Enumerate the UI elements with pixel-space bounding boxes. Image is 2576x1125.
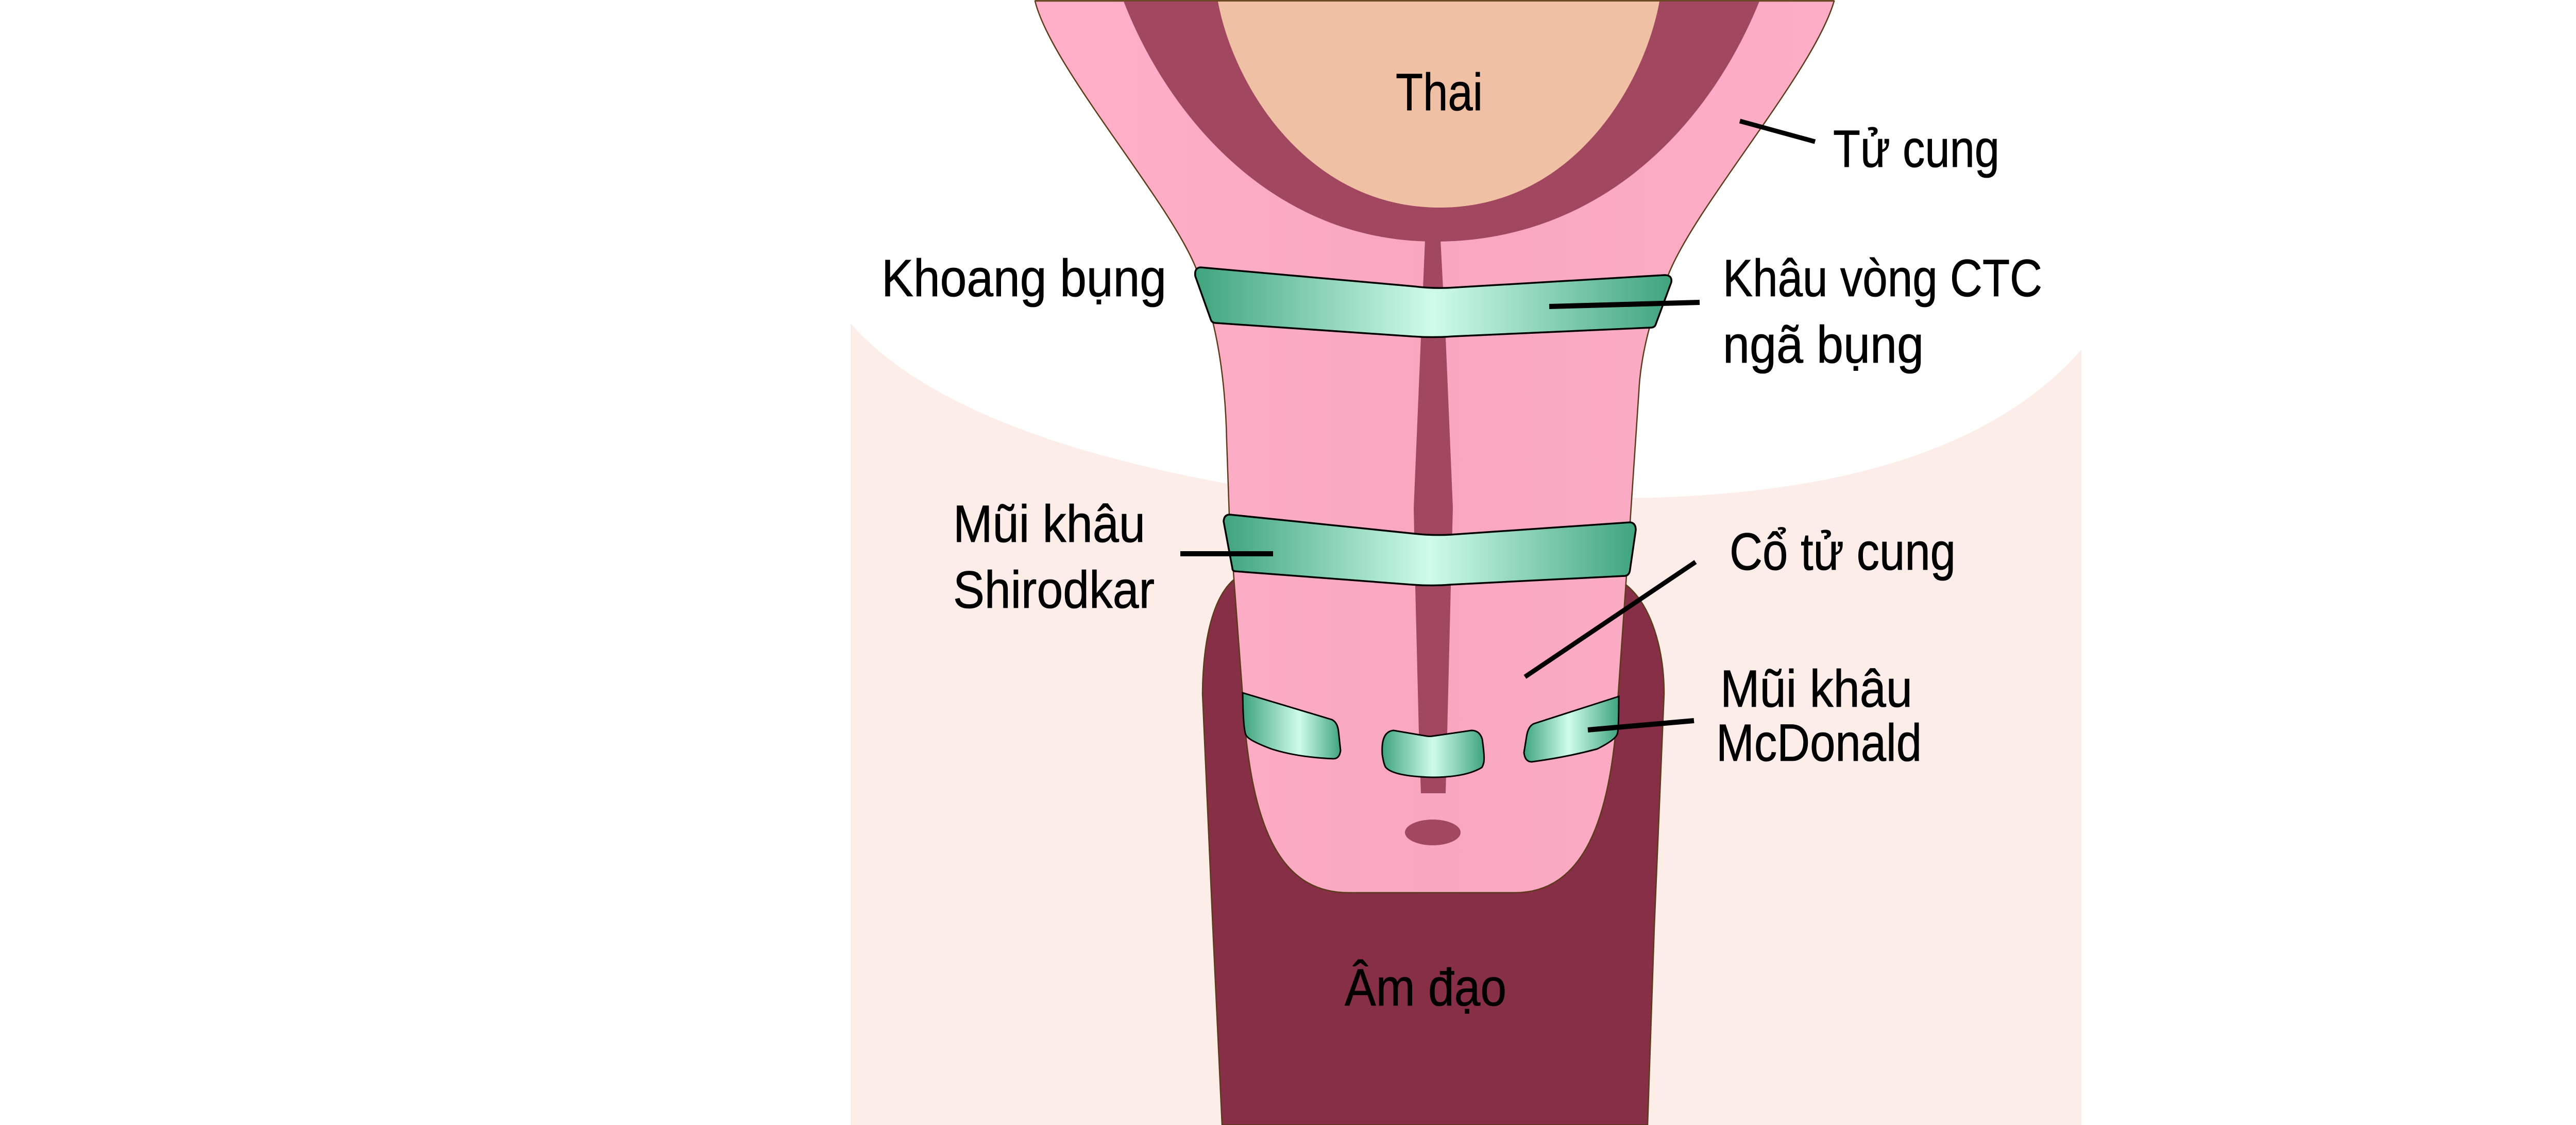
leader line: Khâu vòng CTC bbox=[1549, 302, 1700, 306]
label: Khâu vòng CTC ngã bụng: ngã bụng bbox=[1723, 315, 1924, 374]
fetus sac bbox=[1218, 2, 1659, 208]
uterus and cervix body bbox=[1035, 1, 1834, 893]
label: Cổ tử cung: Cổ tử cung bbox=[1730, 522, 1956, 581]
label: Mũi khâu McDonald: Mũi khâu bbox=[1720, 659, 1912, 718]
label: Mũi khâu McDonald bbox=[1716, 659, 1922, 772]
vagina bbox=[1202, 580, 1664, 1125]
leader line: Tử cung bbox=[1740, 121, 1815, 142]
label: Mũi khâu Shirodkar bbox=[953, 495, 1155, 619]
cervical canal bbox=[1414, 240, 1453, 793]
McDonald stitch: left bbox=[1243, 693, 1341, 759]
McDonald stitch: right bbox=[1524, 696, 1619, 762]
Shirodkar band bbox=[1224, 515, 1636, 585]
label: Thai: Thai bbox=[1396, 63, 1483, 122]
label: Mũi khâu Shirodkar: Shirodkar bbox=[953, 560, 1155, 619]
abdominal cerclage band bbox=[1195, 267, 1671, 337]
label: Khoang bụng: Khoang bụng bbox=[882, 249, 1166, 308]
label: Mũi khâu Shirodkar: Mũi khâu bbox=[953, 495, 1145, 553]
leader line: Cổ tử cung bbox=[1525, 562, 1696, 677]
top edge line bbox=[1035, 0, 1834, 2]
label: Âm đạo: Âm đạo bbox=[1345, 958, 1506, 1017]
uterine lining bbox=[1123, 0, 1760, 242]
label: Mũi khâu McDonald: McDonald bbox=[1716, 713, 1922, 772]
leader line: McDonald bbox=[1588, 721, 1694, 730]
McDonald stitch: centre bbox=[1382, 730, 1484, 777]
abdominal/pelvic background bbox=[851, 0, 2081, 1125]
leader line: Shirodkar bbox=[1180, 551, 1273, 556]
label: Tử cung: Tử cung bbox=[1833, 120, 1999, 178]
label: Khâu vòng CTC ngã bụng: Khâu vòng CTC bbox=[1723, 249, 2042, 308]
label: Khâu vòng CTC ngã bụng bbox=[1723, 249, 2042, 374]
external cervical opening bbox=[1405, 820, 1461, 845]
